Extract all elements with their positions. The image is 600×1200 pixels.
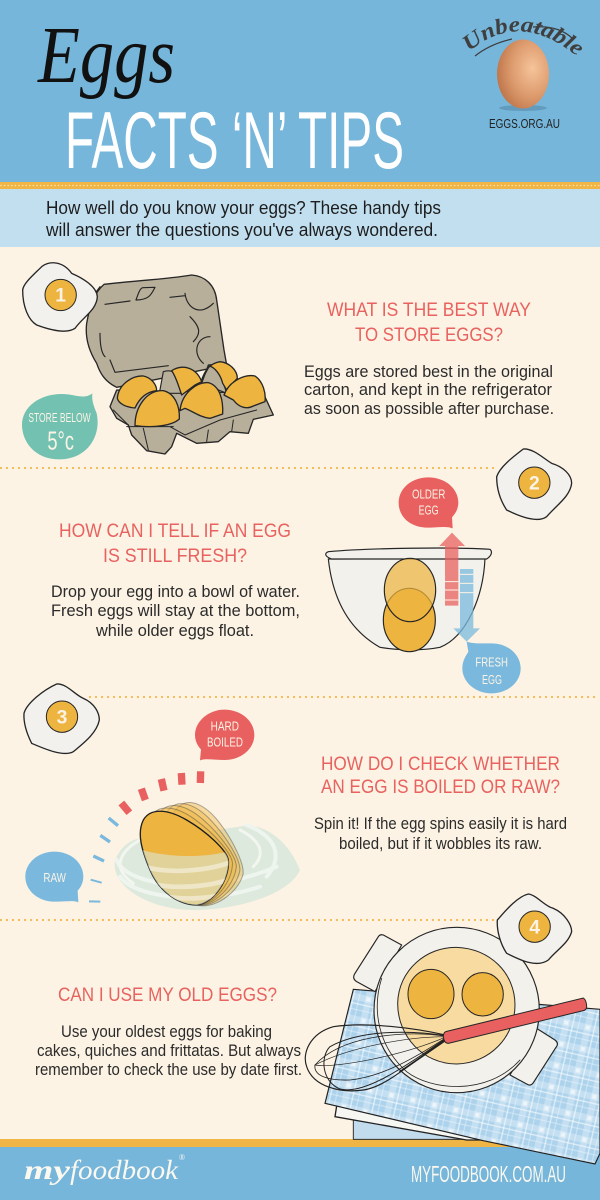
icon: yolks: [408, 969, 503, 1019]
icon: older egg: [384, 558, 436, 622]
panel: intro: [0, 182, 600, 247]
heading: best way to store: WHAT IS THE BEST WAY: [327, 299, 531, 321]
body: tip 4: Use your oldest eggs for baking: [61, 1023, 272, 1041]
icon: fried egg number 1: [23, 263, 97, 331]
callout: hard boiled: [195, 710, 254, 760]
panel: tip 3 text: [314, 753, 567, 853]
body: tip 4: cakes, quiches and frittatas. But always: [37, 1042, 301, 1060]
icon: fried egg number 4: [497, 894, 572, 963]
body: tip 3: Spin it! If the egg spins easily it is hard: [314, 815, 567, 833]
heading: boiled or raw: AN EGG IS BOILED OR RAW?: [321, 776, 560, 798]
body: tip 1: Eggs are stored best in the original: [304, 363, 553, 381]
icon: water swirl: [115, 825, 300, 910]
callout: fresh egg: EGG: [482, 672, 502, 687]
icon: fried egg number 3: [24, 684, 99, 753]
icon: fried egg number 2: 2: [529, 473, 540, 494]
title: Eggs: Eggs: [37, 12, 175, 100]
intro text: How well do you know your eggs? These handy tips: [46, 198, 441, 218]
intro text: will answer the questions you've always wondered.: [45, 220, 438, 240]
icon: tea towels: [325, 989, 600, 1164]
icon: fried egg number 4: 4: [529, 917, 540, 938]
panel: header: [0, 0, 600, 186]
callout: older egg: EGG: [419, 503, 439, 518]
icon: batter: [398, 947, 515, 1064]
icon: carton tray: [110, 390, 273, 454]
icon: bowl: [374, 927, 539, 1093]
panel: footer: [0, 1139, 600, 1200]
icon: main egg: [140, 811, 228, 905]
callout: store below 5°C: 5°c: [47, 425, 74, 455]
icon: carton lid: [86, 275, 227, 387]
body: tip 1: as soon as possible after purchase.: [304, 400, 554, 418]
panel: tip 4 text: [35, 984, 302, 1079]
logo: myfoodbook: ®: [179, 1153, 185, 1162]
logo: Unbeatable egg: EGGS.ORG.AU: [489, 116, 560, 131]
panel: tip 4 whisk illustration: [305, 927, 600, 1164]
heading: best way to store: TO STORE EGGS?: [355, 324, 503, 346]
panel: tip 2 text: [51, 520, 300, 640]
arrow: down to fresh egg: [453, 569, 480, 642]
panel: tip 1 carton illustration: [86, 275, 273, 454]
icon: speed dashes: [89, 771, 201, 902]
body: tip 4: remember to check the use by date first.: [35, 1061, 302, 1079]
callout: raw: [25, 852, 83, 902]
panel: tip 3 spinning egg illustration: [25, 710, 300, 917]
logo: myfoodbook: my foodbook: [24, 1155, 170, 1185]
callout: older egg: [399, 477, 458, 528]
callout: older egg: OLDER: [412, 486, 445, 501]
callout: store below 5°C: STORE BELOW: [28, 411, 91, 425]
body: tip 2: while older eggs float.: [95, 622, 254, 640]
body: tip 2: Drop your egg into a bowl of water.: [51, 583, 300, 601]
icon: whisk: [305, 998, 587, 1091]
icon: carton cups: [159, 365, 227, 393]
icon: fresh egg: [383, 588, 435, 652]
icon: bowl: [328, 558, 485, 650]
heading: boiled or raw: HOW DO I CHECK WHETHER: [321, 753, 560, 775]
callout: hard boiled: BOILED: [207, 735, 243, 750]
arrow: up to older egg: [439, 533, 465, 606]
heading: is it fresh: IS STILL FRESH?: [103, 545, 247, 567]
callout: store below 5°C: [22, 393, 98, 459]
logo: Unbeatable egg: Unbeatable: [462, 18, 582, 54]
icon: yellow eggs: [117, 362, 265, 427]
callout: hard boiled: HARD: [211, 719, 239, 734]
icon: fried egg number 2: [497, 449, 572, 519]
icon: ghost eggs: [141, 797, 261, 917]
panel: tip 1 text: [304, 299, 554, 418]
icon: fried egg number 3: 3: [57, 707, 68, 728]
callout: fresh egg: [462, 642, 521, 693]
logo: Unbeatable egg: [462, 18, 582, 131]
icon: fried egg number 1: 1: [55, 286, 66, 307]
heading: old eggs: CAN I USE MY OLD EGGS?: [58, 984, 277, 1006]
body: tip 3: boiled, but if it wobbles its raw.: [339, 835, 542, 853]
body: tip 1: carton, and kept in the refrigerator: [304, 381, 552, 399]
callout: fresh egg: FRESH: [475, 655, 508, 670]
icon: bowl handles: [354, 935, 402, 992]
panel: tip 2 bowl illustration: [326, 477, 521, 693]
body: tip 2: Fresh eggs will stay at the bottom,: [51, 602, 300, 620]
heading: is it fresh: HOW CAN I TELL IF AN EGG: [59, 520, 291, 542]
callout: raw: RAW: [43, 870, 67, 885]
